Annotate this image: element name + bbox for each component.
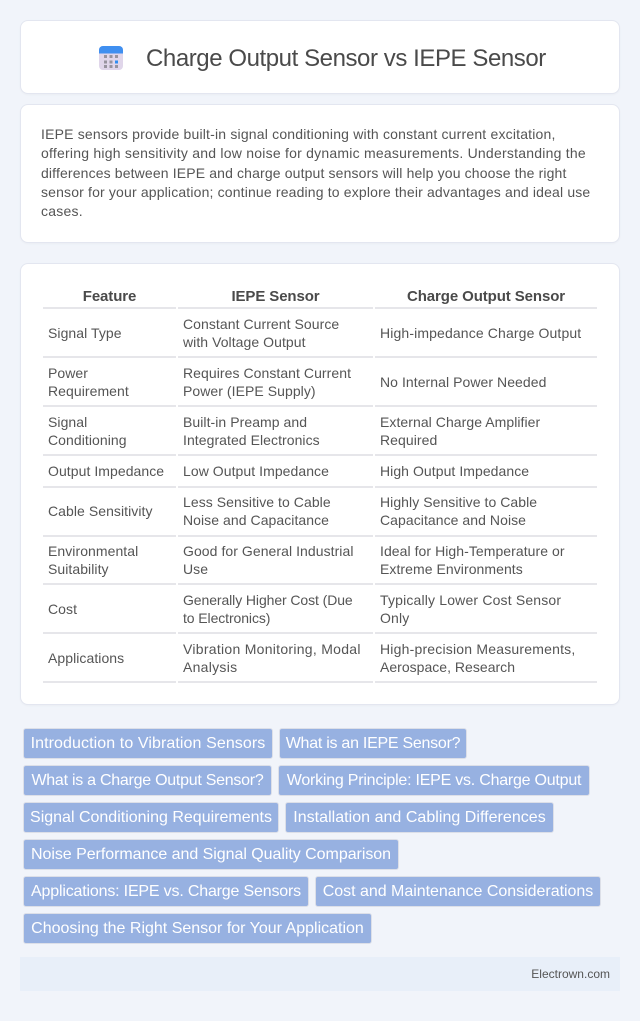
- Applications IEPE: Analysis: [183, 659, 237, 675]
- tag: What is an IEPE Sensor?: [286, 735, 460, 752]
- intro text: offering high sensitivity and low noise for dynamic measurements. Understanding the: [41, 145, 586, 161]
- intro text: sensor for your application; continue reading to explore their advantages and ideal use: [41, 184, 590, 200]
- Applications Charge: High-precision Measurements,: [380, 641, 575, 657]
- Signal Type Charge: High-impedance Charge Output: [380, 325, 581, 341]
- tag: Working Principle: IEPE vs. Charge Output: [287, 772, 581, 789]
- Cable Sensitivity IEPE: [183, 494, 331, 528]
- tag: [285, 802, 554, 833]
- tag: Noise Performance and Signal Quality Comparison: [31, 846, 391, 863]
- row: Signal Type: Signal Type: [48, 325, 122, 341]
- Signal Type IEPE: [183, 316, 339, 350]
- intro text: [41, 126, 590, 219]
- row: Environmental Suitability: [48, 543, 138, 577]
- row: Cable Sensitivity: Cable Sensitivity: [48, 503, 153, 519]
- Signal Type IEPE: with Voltage Output: [183, 334, 306, 350]
- intro text: IEPE sensors provide built-in signal conditioning with constant current excitation,: [41, 126, 556, 142]
- Cost Charge: Typically Lower Cost Sensor: [380, 592, 561, 608]
- tag: [23, 802, 279, 833]
- Power Requirement Charge: No Internal Power Needed: [380, 374, 546, 390]
- tag: [23, 876, 309, 907]
- icon: calendar grid: [99, 46, 123, 70]
- row: Signal Conditioning: [48, 414, 127, 448]
- tag: Introduction to Vibration Sensors: [31, 735, 265, 752]
- header card: [20, 20, 620, 94]
- Applications IEPE: [183, 641, 361, 675]
- Cable Sensitivity IEPE: Noise and Capacitance: [183, 512, 329, 528]
- row: Power Requirement: Power: [48, 365, 88, 381]
- tag: Installation and Cabling Differences: [293, 809, 546, 826]
- Environmental Suitability Charge: Extreme Environments: [380, 561, 523, 577]
- row: Environmental Suitability: Suitability: [48, 561, 109, 577]
- Power Requirement IEPE: Power (IEPE Supply): [183, 383, 316, 399]
- row: Output Impedance: Output Impedance: [48, 463, 164, 479]
- Applications Charge: [380, 641, 575, 675]
- intro text: cases.: [41, 203, 83, 219]
- footer: [20, 957, 620, 991]
- tag: [23, 913, 372, 944]
- comparison table: [43, 288, 597, 683]
- Power Requirement IEPE: Requires Constant Current: [183, 365, 351, 381]
- Cost IEPE: [183, 592, 353, 626]
- tag: [23, 728, 273, 759]
- Signal Conditioning IEPE: [183, 414, 320, 448]
- Cable Sensitivity Charge: [380, 494, 537, 528]
- Power Requirement IEPE: [183, 365, 351, 399]
- tag: What is a Charge Output Sensor?: [31, 772, 264, 789]
- tag: [278, 765, 590, 796]
- Applications IEPE: Vibration Monitoring, Modal: [183, 641, 361, 657]
- Signal Conditioning IEPE: Integrated Electronics: [183, 432, 320, 448]
- Environmental Suitability Charge: [380, 543, 565, 577]
- intro text: differences between IEPE and charge output sensors will help you choose the right: [41, 165, 567, 181]
- panel: comparison table: [20, 263, 620, 705]
- Environmental Suitability Charge: Ideal for High-Temperature or: [380, 543, 565, 559]
- tag: [23, 765, 272, 796]
- footer: Electrown.com: [531, 967, 610, 981]
- row: Applications: Applications: [48, 650, 124, 666]
- Environmental Suitability IEPE: Good for General Industrial: [183, 543, 354, 559]
- tag: [23, 839, 399, 870]
- Cost IEPE: to Electronics): [183, 610, 270, 626]
- Output Impedance Charge: High Output Impedance: [380, 463, 529, 479]
- row: Signal Conditioning: Signal: [48, 414, 87, 430]
- Signal Conditioning Charge: Required: [380, 432, 437, 448]
- Signal Type IEPE: Constant Current Source: [183, 316, 339, 332]
- table header: Feature: Feature: [83, 288, 136, 305]
- Cable Sensitivity IEPE: Less Sensitive to Cable: [183, 494, 331, 510]
- row: Cost: Cost: [48, 601, 77, 617]
- Output Impedance IEPE: Low Output Impedance: [183, 463, 329, 479]
- Applications Charge: Aerospace, Research: [380, 659, 515, 675]
- tag: Signal Conditioning Requirements: [30, 809, 272, 826]
- tag: Cost and Maintenance Considerations: [323, 883, 593, 900]
- Environmental Suitability IEPE: [183, 543, 354, 577]
- row: Power Requirement: Requirement: [48, 383, 129, 399]
- row: Environmental Suitability: Environmental: [48, 543, 138, 559]
- tag: Applications: IEPE vs. Charge Sensors: [31, 883, 301, 900]
- Signal Conditioning Charge: [380, 414, 540, 448]
- Environmental Suitability IEPE: Use: [183, 561, 208, 577]
- tag: Choosing the Right Sensor for Your Application: [31, 920, 364, 937]
- tag: [279, 728, 467, 759]
- panel: intro: [20, 104, 620, 243]
- Cost Charge: Only: [380, 610, 409, 626]
- Signal Conditioning IEPE: Built-in Preamp and: [183, 414, 307, 430]
- table header: IEPE Sensor: IEPE Sensor: [231, 288, 320, 305]
- row: Signal Conditioning: Conditioning: [48, 432, 127, 448]
- Cable Sensitivity Charge: Capacitance and Noise: [380, 512, 526, 528]
- Signal Conditioning Charge: External Charge Amplifier: [380, 414, 540, 430]
- row: Power Requirement: [48, 365, 129, 399]
- Cable Sensitivity Charge: Highly Sensitive to Cable: [380, 494, 537, 510]
- table header: Charge Output Sensor: Charge Output Sensor: [407, 288, 565, 305]
- Cost Charge: [380, 592, 561, 626]
- tag: [315, 876, 601, 907]
- Cost IEPE: Generally Higher Cost (Due: [183, 592, 353, 608]
- title: Charge Output Sensor vs IEPE Sensor: [146, 45, 546, 72]
